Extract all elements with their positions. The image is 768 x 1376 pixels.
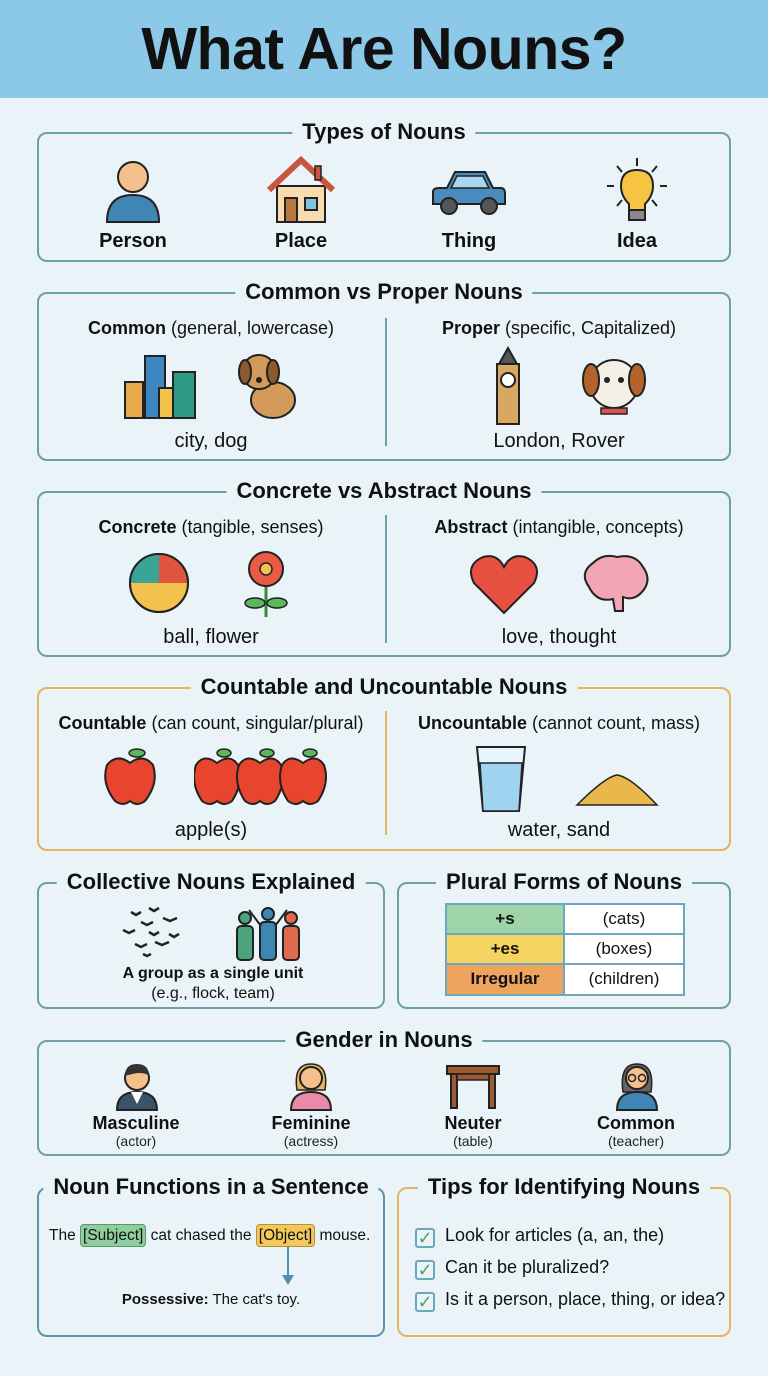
table: plural rules [445, 903, 685, 996]
possessive text: Possessive: The cat's toy. [122, 1291, 300, 1308]
panel: types of nouns [37, 132, 731, 262]
table: plural rules: (children) [589, 969, 659, 988]
panel: common vs proper [37, 292, 731, 461]
label: love thought: love, thought [502, 626, 616, 648]
panel: gender in nouns: (teacher) [608, 1133, 664, 1149]
heading: Collective Nouns Explained [67, 869, 355, 894]
panel: gender in nouns: (actor) [116, 1133, 156, 1149]
label: thing: Thing [442, 230, 496, 252]
icon: apples [194, 748, 327, 805]
icon: table [446, 1065, 500, 1109]
label: neuter: Neuter [444, 1113, 502, 1133]
label: city dog: city, dog [174, 430, 248, 452]
icon: teacher [616, 1063, 658, 1111]
table: plural rules: (boxes) [596, 939, 652, 958]
icon: apple [104, 748, 156, 805]
heading: Countable and Uncountable Nouns [201, 674, 567, 699]
icon: glass of water [476, 746, 526, 812]
icon: team [236, 907, 300, 961]
checklist [415, 1225, 725, 1312]
panel: gender in nouns: (actress) [284, 1133, 338, 1149]
label: place: Place [275, 230, 327, 252]
icon: heart [470, 555, 538, 614]
icon: ball [129, 553, 189, 613]
icon: house [267, 156, 335, 223]
panel: plural forms [397, 882, 731, 1009]
table: plural rules: +es [491, 939, 519, 958]
text: proper: Proper (specific, Capitalized) [442, 318, 676, 338]
table: plural rules: +s [495, 909, 515, 928]
icon: flower [244, 551, 288, 617]
text: common: Common (general, lowercase) [88, 318, 334, 338]
icon: sand pile [575, 774, 659, 806]
icon: city [124, 355, 196, 419]
heading: Common vs Proper Nouns [245, 279, 523, 304]
icon: flock of birds [122, 906, 180, 958]
text: uncountable: Uncountable (cannot count, mass) [418, 713, 700, 733]
panel: tips [397, 1187, 731, 1337]
arrow [282, 1247, 294, 1285]
label: person: Person [99, 230, 167, 252]
label: common: Common [597, 1113, 675, 1133]
heading: Gender in Nouns [295, 1027, 473, 1052]
label: london rover: London, Rover [493, 430, 625, 452]
icon: car [432, 171, 506, 215]
label: masculine: Masculine [92, 1113, 180, 1133]
label: water sand: water, sand [508, 819, 610, 841]
icon: rover dog [582, 359, 646, 415]
panel: collective nouns [37, 882, 385, 1009]
text: collective description: A group as a single unit [123, 965, 303, 982]
icon: man [116, 1064, 158, 1111]
text: concrete: Concrete (tangible, senses) [98, 517, 324, 537]
icon: dog [238, 354, 296, 419]
icon: big ben [496, 346, 520, 425]
text: abstract: Abstract (intangible, concepts) [434, 517, 684, 537]
text: countable: Countable (can count, singular/plural) [58, 713, 364, 733]
heading: Noun Functions in a Sentence [53, 1174, 369, 1199]
icon: brain [584, 554, 649, 612]
label: apples: apple(s) [175, 819, 247, 841]
label: idea: Idea [617, 230, 657, 252]
label: ball flower: ball, flower [163, 626, 259, 648]
checklist: Look for articles (a, an, the) [445, 1225, 664, 1245]
checklist: ✓ [417, 1292, 433, 1312]
header: What Are Nouns? [141, 16, 627, 82]
text: collective description [123, 965, 304, 1002]
panel: gender in nouns [37, 1040, 731, 1156]
table: plural rules: (cats) [603, 909, 645, 928]
panel: countable and uncountable [37, 687, 731, 851]
header [0, 0, 768, 98]
checklist: ✓ [417, 1228, 433, 1248]
panel: noun functions [37, 1187, 385, 1337]
heading: Tips for Identifying Nouns [428, 1174, 700, 1199]
panel: concrete vs abstract [37, 491, 731, 657]
sentence: The [Subject] cat chased the [Object] mouse. [49, 1227, 370, 1244]
heading: Plural Forms of Nouns [446, 869, 682, 894]
heading: Concrete vs Abstract Nouns [236, 478, 532, 503]
table: plural rules: Irregular [470, 969, 539, 988]
icon: person [106, 161, 160, 223]
checklist: ✓ [417, 1260, 433, 1280]
icon: lightbulb [607, 158, 667, 221]
checklist: Can it be pluralized? [445, 1257, 609, 1277]
label: feminine: Feminine [271, 1113, 351, 1133]
icon: woman [290, 1063, 332, 1111]
text: collective description: (e.g., flock, team) [151, 985, 275, 1002]
heading: Types of Nouns [302, 119, 466, 144]
panel: gender in nouns: (table) [453, 1133, 493, 1149]
checklist: Is it a person, place, thing, or idea? [445, 1289, 725, 1309]
